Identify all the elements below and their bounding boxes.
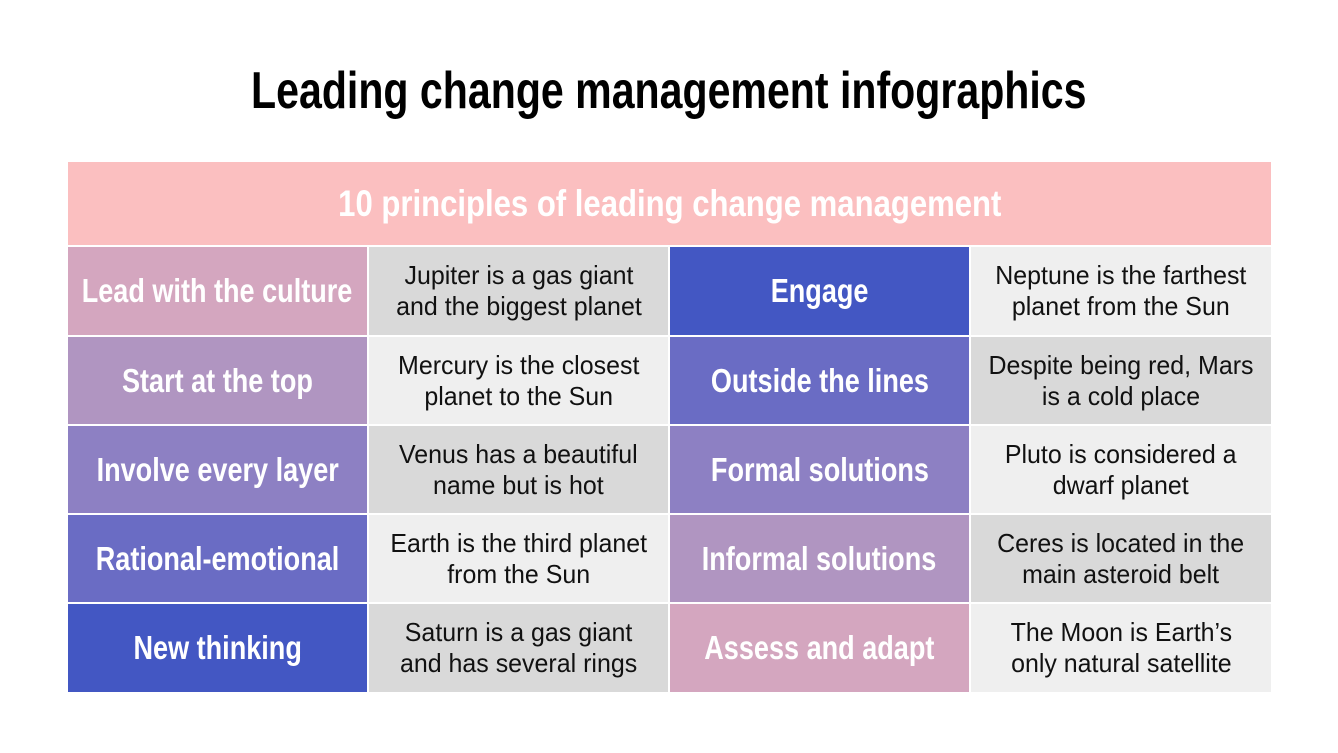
row 2: Mercury is the closest [398,350,639,380]
row 5: The Moon is Earth’s [1010,617,1232,647]
row 3: Formal solutions [710,450,928,488]
row 2: planet to the Sun [424,380,613,410]
row 4 [68,515,1271,602]
header: 10 principles of leading change management [338,182,1001,224]
row 4: Ceres is located in the [998,528,1244,558]
row 1: planet from the Sun [1012,291,1230,321]
row 3: dwarf planet [1053,470,1189,500]
row 5: only natural satellite [1011,648,1231,678]
header [68,162,1271,245]
row 2 [68,337,1271,424]
row 3: Venus has a beautiful [399,438,638,468]
title: Leading change management infographics [251,62,1087,120]
row 1: Engage [771,272,868,309]
row 5: New thinking [133,629,302,666]
row 1: Jupiter is a gas giant [404,260,633,290]
row 4: Rational-emotional [96,540,339,576]
row 4: main asteroid belt [1022,558,1220,588]
row 2: Despite being red, Mars [989,350,1253,380]
row 4: from the Sun [447,558,590,588]
row 1: and the biggest planet [396,291,641,321]
row 4: Informal solutions [702,540,937,576]
row 5: Assess and adapt [704,629,935,666]
row 5: Saturn is a gas giant [405,617,632,647]
row 2: Start at the top [122,362,313,398]
row 1 [68,247,1271,335]
row 4: Earth is the third planet [390,528,647,558]
row 2: Outside the lines [710,362,929,398]
row 1: Lead with the culture [82,272,353,309]
table [68,162,1271,692]
row 5 [68,604,1271,692]
row 2: is a cold place [1042,380,1200,410]
row 1: Neptune is the farthest [995,260,1247,290]
row 3: name but is hot [433,470,604,500]
row 5: and has several rings [400,648,637,678]
row 3: Pluto is considered a [1005,438,1237,468]
row 3 [68,426,1271,513]
row 3: Involve every layer [96,450,339,488]
